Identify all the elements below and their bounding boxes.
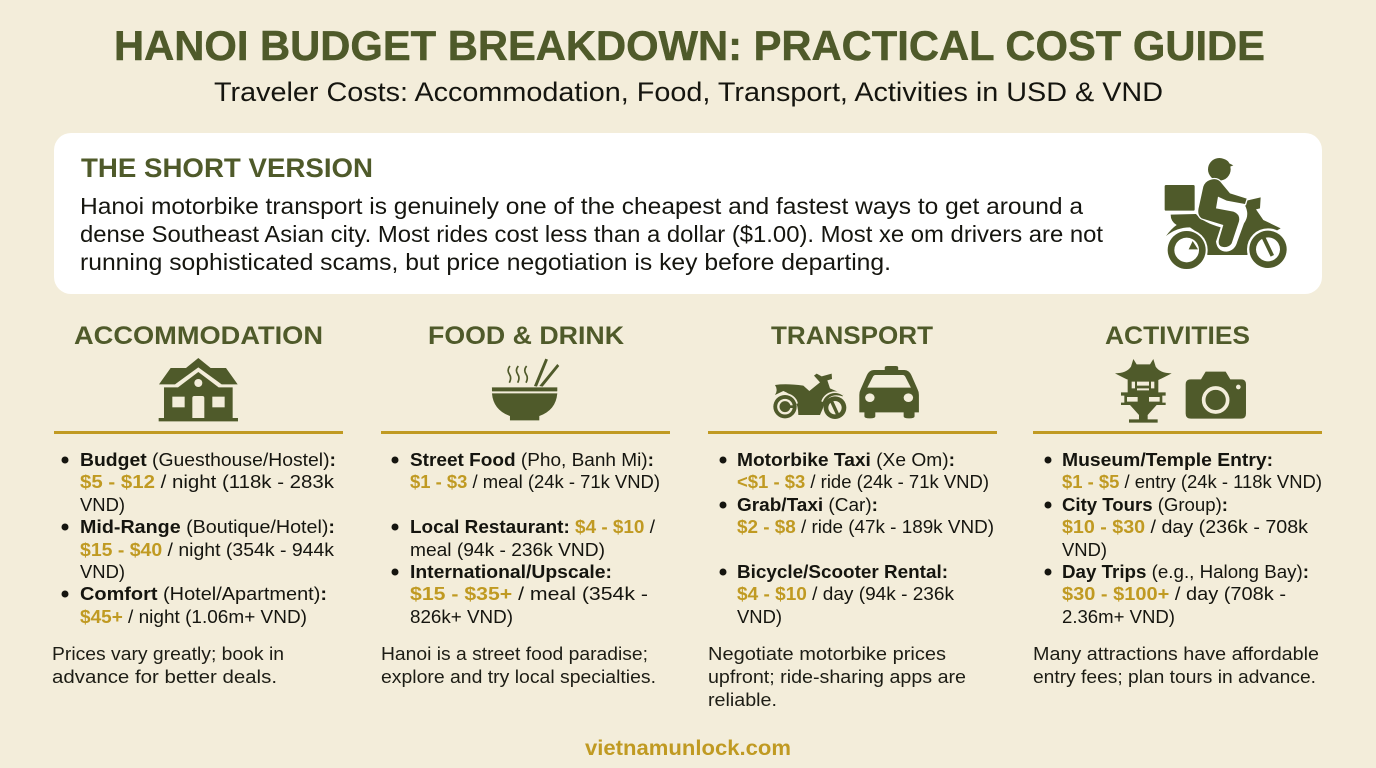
note: Negotiate motorbike prices <box>708 644 946 664</box>
column: accommodation <box>52 322 343 687</box>
heading: food and drink: FOOD & DRINK <box>428 322 624 350</box>
note: reliable. <box>708 690 777 710</box>
note: Many attractions have affordable <box>1033 644 1319 664</box>
subtitle: Traveler Costs: Accommodation, Food, Transport, Activities in USD & VND <box>214 77 1163 107</box>
cost list: Day Trips (e.g., Halong Bay) : <box>1062 562 1309 582</box>
heading: accommodation: ACCOMMODATION <box>74 322 323 350</box>
divider <box>1033 431 1322 434</box>
divider <box>381 431 670 434</box>
cost list <box>62 450 336 627</box>
cost list: Museum/Temple Entry: <box>1062 450 1273 470</box>
icon: noodle bowl <box>492 359 559 420</box>
note: upfront; ride-sharing apps are <box>708 667 966 687</box>
cost list: $4 - $10 / day (94k - 236k <box>737 584 955 604</box>
cost list: Budget (Guesthouse/Hostel) : <box>80 450 336 470</box>
cost list: City Tours (Group): <box>1062 495 1228 515</box>
note <box>381 644 656 687</box>
heading: activities: ACTIVITIES <box>1105 322 1250 350</box>
cost list: $15 - $40 / night (354k - 944k <box>80 540 335 560</box>
icon: motorbike <box>773 374 848 419</box>
cost list <box>392 450 660 627</box>
icon: pagoda <box>1115 359 1172 423</box>
panel body text: running sophisticated scams, but price negotiation is key before departing. <box>80 249 891 275</box>
cost list: VND) <box>737 607 782 627</box>
note: advance for better deals. <box>52 667 277 687</box>
note <box>708 644 966 710</box>
cost list: Local Restaurant: $4 - $10 / <box>410 517 655 537</box>
cost list <box>1044 450 1322 627</box>
column: activities <box>1033 322 1322 687</box>
cost list: $30 - $100+ / day (708k - <box>1062 584 1286 604</box>
icon: taxi <box>859 366 919 418</box>
panel: the short version <box>54 133 1322 294</box>
title: HANOI BUDGET BREAKDOWN: PRACTICAL COST GUIDE <box>114 22 1265 69</box>
cost list: $2 - $8 / ride (47k - 189k VND) <box>737 517 994 537</box>
cost list: Comfort (Hotel/Apartment) : <box>80 584 327 604</box>
cost list: Bicycle/Scooter Rental: <box>737 562 948 582</box>
cost list: International/Upscale: <box>410 562 612 582</box>
cost list: 2.36m+ VND) <box>1062 607 1175 627</box>
cost list: Motorbike Taxi (Xe Om) : <box>737 450 955 470</box>
cost list: $10 - $30 / day (236k - 708k <box>1062 517 1309 537</box>
note: entry fees; plan tours in advance. <box>1033 667 1316 687</box>
note: Prices vary greatly; book in <box>52 644 284 664</box>
note <box>1033 644 1319 687</box>
cost list: $45+ / night (1.06m+ VND) <box>80 607 307 627</box>
column: food and drink <box>381 322 670 687</box>
panel body text: dense Southeast Asian city. Most rides cost less than a dollar ($1.00). Most xe om drivers are not <box>80 221 1104 247</box>
cost list: $15 - $35+ / meal (354k - <box>410 584 648 604</box>
cost list: meal (94k - 236k VND) <box>410 540 605 560</box>
divider <box>54 431 343 434</box>
note <box>52 644 284 687</box>
cost list: 826k+ VND) <box>410 607 513 627</box>
icon: delivery motorbike rider <box>1165 158 1289 271</box>
cost list: <$1 - $3 / ride (24k - 71k VND) <box>737 472 989 492</box>
icon: house <box>159 358 238 421</box>
cost list: VND) <box>80 495 125 515</box>
cost list: $1 - $5 / entry (24k - 118k VND) <box>1062 472 1322 492</box>
panel body text <box>80 193 1104 275</box>
note: explore and try local specialties. <box>381 667 656 687</box>
column: transport <box>708 322 997 710</box>
cost list: Mid-Range (Boutique/Hotel) : <box>80 517 335 537</box>
cost list <box>720 450 994 627</box>
footer website: vietnamunlock.com <box>585 737 791 760</box>
panel body text: Hanoi motorbike transport is genuinely one of the cheapest and fastest ways to get around a <box>80 193 1083 219</box>
panel heading: THE SHORT VERSION <box>81 153 373 183</box>
heading: transport: TRANSPORT <box>771 322 933 350</box>
icon: camera <box>1186 372 1246 419</box>
cost list: Street Food (Pho, Banh Mi) : <box>410 450 654 470</box>
cost list: $1 - $3 / meal (24k - 71k VND) <box>410 472 660 492</box>
cost list: VND) <box>1062 540 1107 560</box>
cost list: VND) <box>80 562 125 582</box>
cost list: $5 - $12 / night (118k - 283k <box>80 472 335 492</box>
note: Hanoi is a street food paradise; <box>381 644 648 664</box>
divider <box>708 431 997 434</box>
cost list: Grab/Taxi (Car): <box>737 495 878 515</box>
